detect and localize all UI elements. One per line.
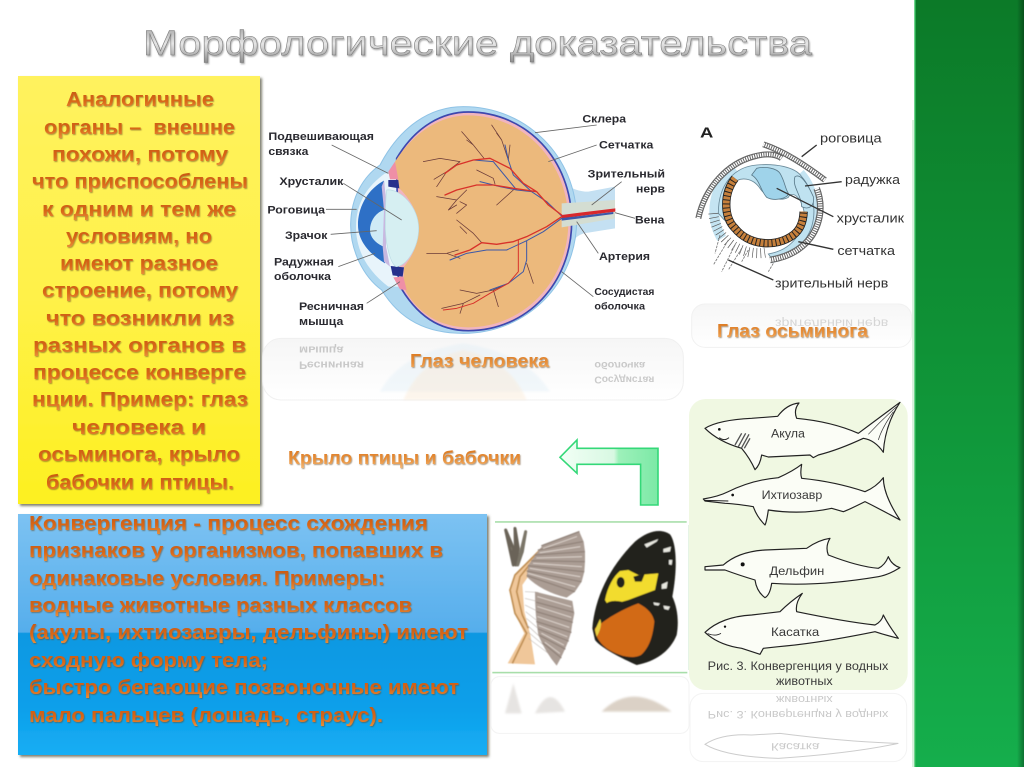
thin green frame line: [912, 120, 914, 767]
octopus labels: А: [700, 125, 714, 141]
eye labels: Роговица: [267, 204, 326, 216]
eye labels: нерв: [636, 184, 665, 196]
definition text: что возникли из: [46, 307, 234, 330]
eye labels: Хрусталик: [279, 176, 344, 188]
reflection of figure: животных: [776, 693, 833, 705]
dolphin: [705, 538, 900, 598]
definition text: человека и: [72, 416, 206, 439]
sclera: [351, 107, 577, 333]
octopus labels: [700, 125, 905, 290]
panel: aquatic animals convergence: [689, 399, 908, 762]
retina band: [726, 178, 804, 243]
panel: bird wing and butterfly wing: [491, 521, 689, 733]
dolphin: Дельфин: [769, 564, 824, 578]
panel: octopus eye reflection: [692, 304, 912, 347]
photo frame: [491, 522, 689, 673]
eye labels: мышца: [299, 316, 344, 328]
convergence text: водные животные разных классов: [29, 594, 412, 617]
eye labels: Артерия: [599, 251, 650, 263]
shark: Акула: [771, 427, 805, 441]
figure caption: Рис. 3. Конвергенция у водных: [708, 659, 889, 673]
panel: human eye reflection: Ресничная: [299, 359, 364, 371]
octopus labels: роговица: [820, 131, 883, 145]
convergence text: одинаковые условия. Примеры:: [29, 567, 385, 590]
panel: human eye reflection: [263, 338, 683, 400]
octopus leader lines: [728, 145, 842, 280]
definition text: Аналогичные: [66, 88, 214, 111]
eye labels: оболочка: [274, 271, 332, 283]
lens: [385, 190, 419, 267]
eye labels: Склера: [582, 113, 627, 125]
killer whale: [705, 593, 898, 654]
definition text: органы – внешне: [44, 116, 235, 139]
vein and artery: [562, 208, 615, 218]
light blue wall band: [714, 168, 813, 258]
octopus labels: сетчатка: [837, 244, 896, 258]
definition text: к одним и тем же: [42, 198, 236, 221]
title: Морфологические доказательства: [143, 24, 813, 63]
diagram: octopus eye: [698, 125, 905, 290]
arrow: [560, 440, 658, 505]
eye labels: [267, 113, 665, 328]
convergence text: быстро бегающие позвоночные имеют: [29, 676, 459, 699]
convergence text: (акулы, ихтиозавры, дельфины) имеют: [29, 621, 468, 644]
eye labels: связка: [268, 146, 309, 158]
retina interior: [395, 115, 568, 327]
eye labels: Сосудистая: [594, 287, 654, 298]
octopus labels: зрительный нерв: [775, 276, 889, 290]
definition text: что приспособлены: [32, 170, 248, 193]
caption: bird and butterfly wing: Крыло птицы и бабочки: [288, 448, 521, 468]
reflection of figure: Рис. 3. Конвергенция у водных: [708, 708, 889, 720]
convergence text: сходную форму тела;: [29, 649, 268, 672]
reflection of figure: Касатка: [771, 740, 820, 752]
figure caption: животных: [776, 674, 834, 688]
butterfly wing: [592, 531, 678, 665]
reflection of figure: [690, 693, 907, 762]
definition text: разных органов в: [33, 334, 246, 357]
definition text: процессе конверге: [33, 361, 246, 384]
eye labels: Сетчатка: [599, 139, 654, 151]
definition text: строение, потому: [42, 279, 239, 302]
eye labels: Ресничная: [299, 301, 364, 313]
reflection of wing photo: [491, 677, 689, 733]
definition text: условиям, но: [66, 225, 212, 248]
cornea inner chamber: [356, 173, 400, 287]
caption: human eye: Глаз человека: [410, 351, 550, 371]
definition text: имеют разное: [60, 252, 218, 275]
choroid dark ring: [397, 112, 572, 331]
definition text: бабочки и птицы.: [46, 471, 234, 494]
receptor ladder: [713, 213, 765, 253]
eye labels: Зрачок: [285, 230, 328, 242]
convergence text: признаков у организмов, попавших в: [29, 539, 443, 562]
definition text: похожи, потому: [52, 143, 229, 166]
eye labels: Радужная: [274, 257, 334, 269]
iris: [358, 181, 385, 263]
convergence text: Конвергенция - процесс схождения: [29, 512, 428, 535]
bird wing: [506, 528, 585, 666]
panel: human eye reflection: мышца: [299, 344, 344, 356]
panel: human eye reflection: Сосудистая: [594, 374, 654, 385]
retinal vessels: [423, 125, 615, 313]
diagram: human eye: [267, 107, 665, 333]
leader lines: [326, 125, 635, 303]
outer wall right: [770, 188, 820, 260]
panel: octopus eye reflection: зрительный нерв: [775, 316, 888, 329]
caption: octopus eye: Глаз осьминога: [717, 321, 869, 341]
cornea: [763, 144, 825, 180]
convergence text: [29, 512, 468, 727]
killer whale: Касатка: [771, 625, 819, 639]
ichthyosaur: Ихтиозавр: [762, 488, 822, 502]
eye labels: Подвешивающая: [268, 131, 374, 143]
panel: convergence definition: [18, 512, 487, 755]
octopus labels: радужка: [845, 173, 901, 187]
panel: human eye reflection: оболочка: [594, 359, 645, 371]
panel: analogous organs definition: [18, 76, 260, 504]
optic nerve sheath: [565, 183, 615, 247]
octopus labels: хрусталик: [837, 211, 905, 225]
ichthyosaur: [703, 464, 900, 525]
eye labels: оболочка: [594, 300, 645, 312]
eye labels: Вена: [635, 214, 665, 226]
lens and iris fluid: [718, 165, 814, 258]
optic nerve core: [562, 200, 615, 227]
convergence text: мало пальцев (лошадь, страус).: [29, 704, 383, 727]
eye labels: Зрительный: [588, 168, 665, 180]
ciliary muscle: [388, 162, 407, 290]
figure caption: [708, 659, 889, 688]
outer wall upper left: [698, 154, 782, 218]
optic nerve fibres: [713, 235, 773, 272]
definition text: [32, 88, 248, 494]
definition text: нции. Пример: глаз: [32, 388, 248, 411]
shark: [705, 402, 900, 470]
green side band: [914, 0, 1024, 767]
definition text: осьминога, крыло: [38, 443, 240, 466]
